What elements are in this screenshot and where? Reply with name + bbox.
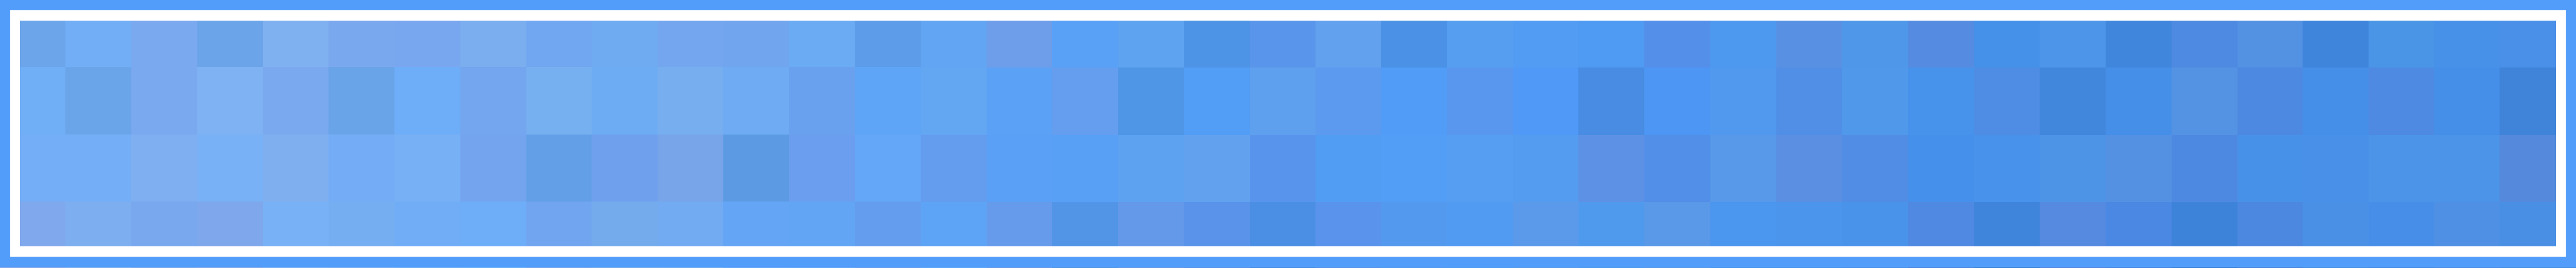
tile row 1 bbox=[0, 0, 2576, 68]
tile row 2 bbox=[0, 67, 2576, 135]
tile row 4 bbox=[0, 202, 2576, 268]
tile row 3 bbox=[0, 135, 2576, 202]
